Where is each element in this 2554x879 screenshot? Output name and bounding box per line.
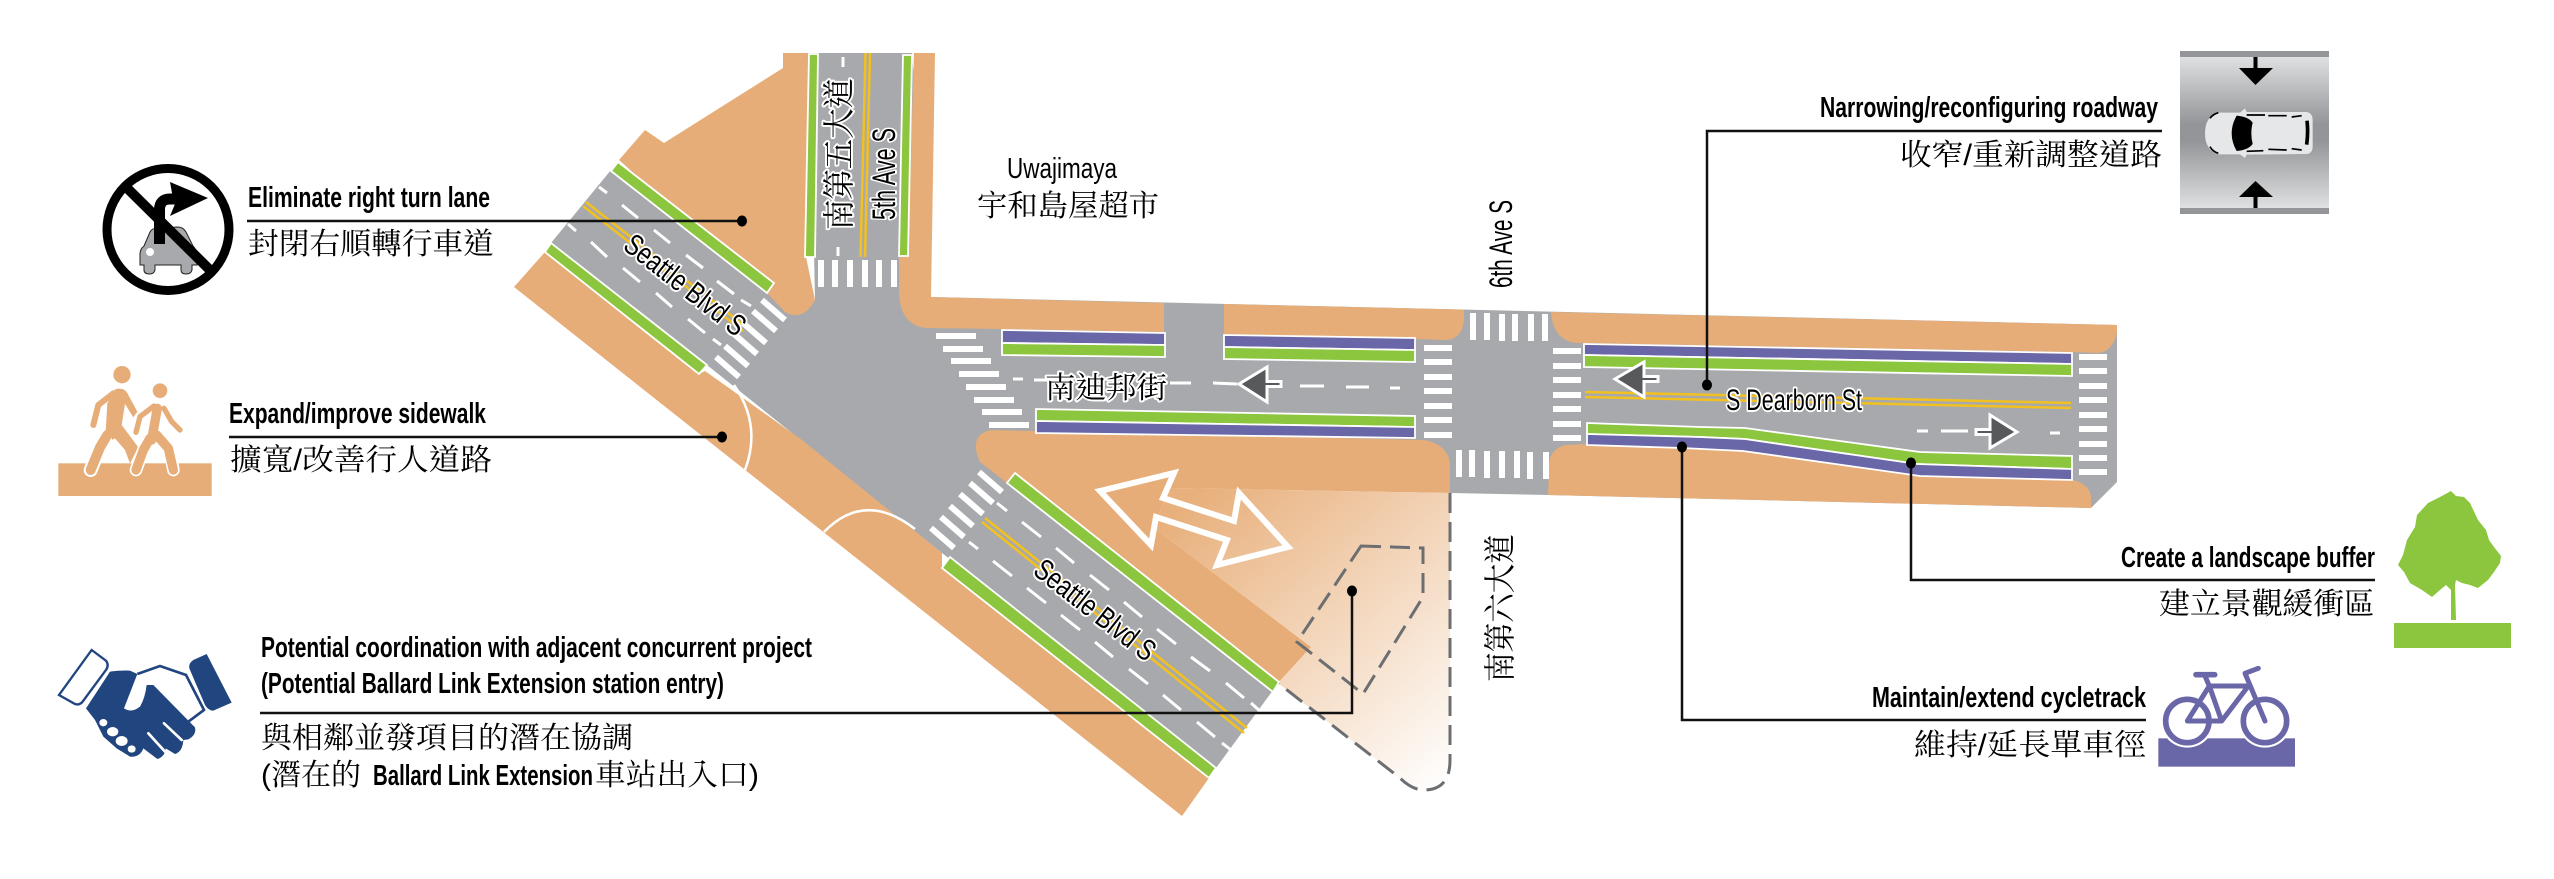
callout: expand sidewalk: 擴寬/改善行人道路 [230, 444, 492, 477]
landmark label: Uwajimaya: Uwajimaya [1007, 153, 1118, 185]
callout: cycletrack [1677, 442, 2147, 762]
street label: 6th Ave S: 6th Ave S [1483, 200, 1519, 288]
station entry dashed outline [1297, 546, 1423, 694]
callout: potential coordination: Potential coordination with adjacent concurrent project [261, 632, 812, 664]
cycletrack and landscape strips: Dearborn east [1584, 344, 2072, 480]
callout: potential coordination: Ballard Link Extension [373, 760, 593, 792]
double-headed project arrow [1100, 473, 1288, 565]
landmark label: Uwajimaya [977, 153, 1159, 223]
sidewalk: north of Seattle Blvd [619, 53, 815, 315]
icon: bicycle [2158, 668, 2295, 767]
icon: handshake [59, 650, 232, 759]
callout: potential coordination: (Potential Ballard Link Extension station entry) [261, 668, 724, 700]
street label: Seattle Blvd S north: Seattle Blvd S [617, 228, 752, 343]
street label: 南迪邦街: 南迪邦街 [1045, 372, 1167, 405]
street label: 5th Ave S: 5th Ave S [866, 128, 902, 220]
sidewalk: wedge south of Dearborn [976, 430, 1450, 682]
callout: potential coordination: 與相鄰並發項目的潛在協調 [261, 722, 633, 755]
landmark label: Uwajimaya: 宇和島屋超市 [977, 190, 1159, 223]
project area dashed outline [1278, 493, 1450, 790]
street label: 南第六大道: 南第六大道 [1482, 534, 1518, 682]
callout: landscape buffer: 建立景觀緩衝區 [2159, 588, 2375, 621]
lane dashes [568, 57, 2060, 750]
callout: cycletrack: Maintain/extend cycletrack [1872, 682, 2147, 714]
callout: potential coordination: 車站出入口) [595, 759, 759, 792]
sidewalk: north side east of 6th Ave [1551, 312, 2117, 353]
icon: no right turn [107, 168, 229, 290]
landscape strips: Seattle Blvd [545, 162, 1279, 778]
street label: 南第五大道: 南第五大道 [821, 78, 857, 230]
landscape strips: 5th Ave [805, 54, 912, 257]
icon: narrowed road with car [2180, 51, 2329, 214]
icon: pedestrians [58, 366, 212, 496]
corner curb arcs [734, 385, 915, 532]
callout: eliminate right turn lane [247, 182, 747, 261]
callout: narrowing roadway [1702, 92, 2162, 390]
callout: landscape buffer [1906, 458, 2375, 621]
callout: expand sidewalk [229, 398, 727, 477]
sidewalk: south-west of Seattle Blvd [514, 252, 1209, 816]
sidewalk: south side east of 6th Ave [1548, 444, 2091, 508]
crosswalks [716, 260, 2107, 548]
callout: landscape buffer: Create a landscape buffer [2121, 542, 2375, 574]
street plan map [514, 53, 2117, 816]
direction arrows [1239, 362, 2017, 448]
callout: eliminate right turn lane: 封閉右順轉行車道 [248, 228, 494, 261]
callout: narrowing roadway: Narrowing/reconfiguring roadway [1820, 92, 2158, 124]
centre double yellow lines [583, 53, 2071, 733]
street label: S Dearborn St: S Dearborn St [1726, 384, 1862, 417]
street label: Seattle Blvd S south: Seattle Blvd S [1027, 553, 1162, 668]
icon: tree [2394, 491, 2511, 648]
callout: potential coordination: (潛在的 [261, 759, 361, 792]
callout: potential coordination [260, 586, 1357, 792]
roadway surface [551, 53, 2117, 768]
faded adjacent project area [1153, 488, 1450, 790]
cycletrack and landscape strips: Dearborn west [1002, 330, 1415, 438]
callout: expand sidewalk: Expand/improve sidewalk [229, 398, 487, 430]
callout: eliminate right turn lane: Eliminate right turn lane [248, 182, 490, 214]
callout: narrowing roadway: 收窄/重新調整道路 [1900, 139, 2162, 172]
sidewalk: north side between alley and 6th Ave [1224, 304, 1464, 340]
callout: cycletrack: 維持/延長單車徑 [1914, 729, 2146, 762]
sidewalk: Uwajimaya frontage [899, 53, 1164, 332]
